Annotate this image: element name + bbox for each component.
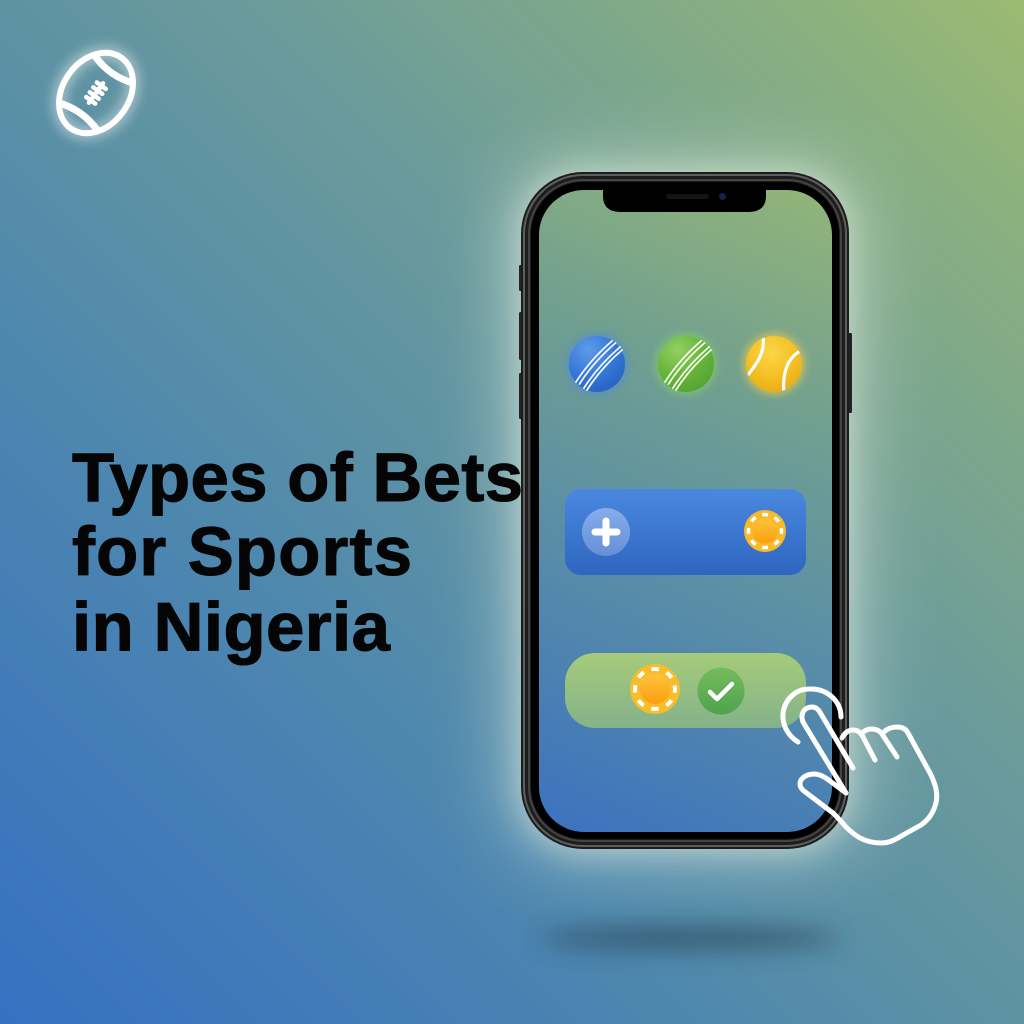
icon: green cricket ball xyxy=(655,333,717,395)
title: for Sports xyxy=(72,513,412,590)
side buttons xyxy=(519,265,852,419)
title: in Nigeria xyxy=(72,588,391,666)
icon: chip xyxy=(744,510,786,552)
panel: green confirm bet xyxy=(565,653,806,728)
icon: american football xyxy=(44,38,148,148)
title xyxy=(72,439,523,666)
phone glow xyxy=(505,160,865,860)
icon: yellow tennis ball xyxy=(743,333,805,395)
screen xyxy=(539,190,832,832)
floor shadow xyxy=(540,926,840,950)
icon: chip xyxy=(630,664,680,714)
icon: blue cricket ball xyxy=(566,333,628,395)
panel: blue add bet xyxy=(565,489,806,575)
icon: tapping hand xyxy=(783,689,937,843)
icon: plus xyxy=(582,508,630,556)
notch xyxy=(603,190,766,212)
camera xyxy=(719,193,726,200)
phone body xyxy=(521,172,849,849)
phone xyxy=(519,172,852,849)
title: Types of Bets xyxy=(72,439,523,516)
speaker xyxy=(666,194,709,199)
icon: check xyxy=(698,668,744,714)
